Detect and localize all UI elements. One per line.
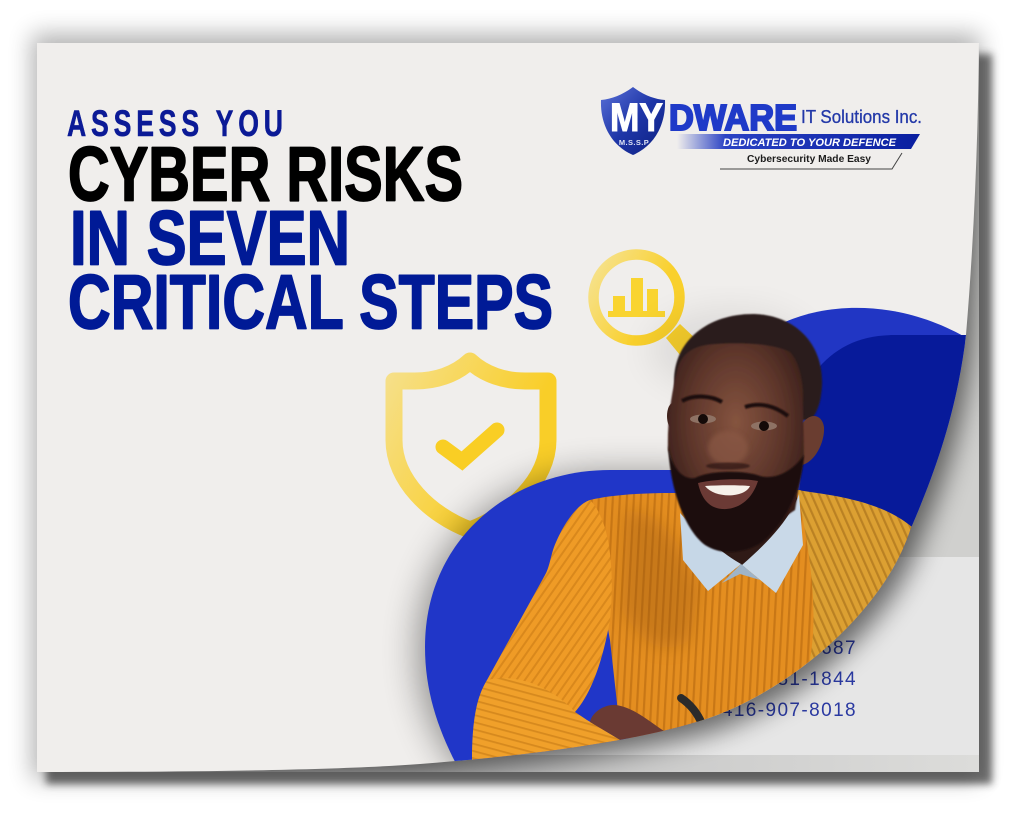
hand (590, 705, 664, 741)
blue blob: lower (425, 470, 700, 775)
arm gap (586, 720, 587, 721)
pen (681, 698, 702, 724)
blob shadow (419, 474, 694, 774)
logo (601, 87, 922, 169)
phone numbers: 416-907-8018 (722, 700, 857, 721)
heading: assess you cyber risks in seven critical steps (67, 103, 553, 346)
heading: assess you cyber risks in seven critical steps: CRITICAL STEPS (68, 260, 553, 346)
eyes (690, 414, 777, 431)
icon: shield with check (394, 361, 548, 530)
shirt collar (680, 494, 803, 593)
beard (668, 445, 804, 552)
logo: MY (610, 96, 663, 140)
nose shadow (706, 462, 750, 470)
lower lip (698, 479, 758, 509)
sweater shading (622, 510, 700, 648)
head shadow (654, 308, 782, 379)
logo: DEDICATED TO YOUR DEFENCE (723, 137, 897, 149)
neck (720, 496, 798, 568)
icon: magnifier with bar chart (594, 254, 697, 355)
phone numbers: 687 (821, 638, 857, 659)
cuff (472, 678, 622, 762)
ear left (667, 404, 672, 426)
ear right (802, 416, 824, 465)
phone numbers: 81-1844 (777, 669, 857, 690)
heading: assess you cyber risks in seven critical steps: IN SEVEN (70, 196, 350, 282)
navy blob: upper inner (790, 335, 975, 560)
heading: assess you cyber risks in seven critical steps: CYBER RISKS (68, 132, 463, 218)
person (472, 314, 925, 762)
turned page underside (151, 50, 979, 772)
brows (682, 397, 788, 416)
nose (708, 432, 748, 463)
logo: IT Solutions Inc. (801, 107, 922, 127)
sweater right shoulder (798, 490, 912, 662)
hair (674, 314, 822, 420)
upper sleeve (487, 500, 612, 712)
face (666, 342, 804, 516)
blue blob: upper (785, 308, 966, 559)
heading: assess you cyber risks in seven critical steps: ASSESS YOU (67, 103, 283, 144)
logo: Cybersecurity Made Easy (747, 153, 871, 165)
logo: M.S.S.P (619, 138, 649, 147)
phone numbers (722, 640, 855, 716)
teeth (705, 485, 750, 495)
logo shield (601, 87, 665, 155)
logo: DWARE (669, 97, 797, 138)
sweater torso (590, 490, 904, 738)
